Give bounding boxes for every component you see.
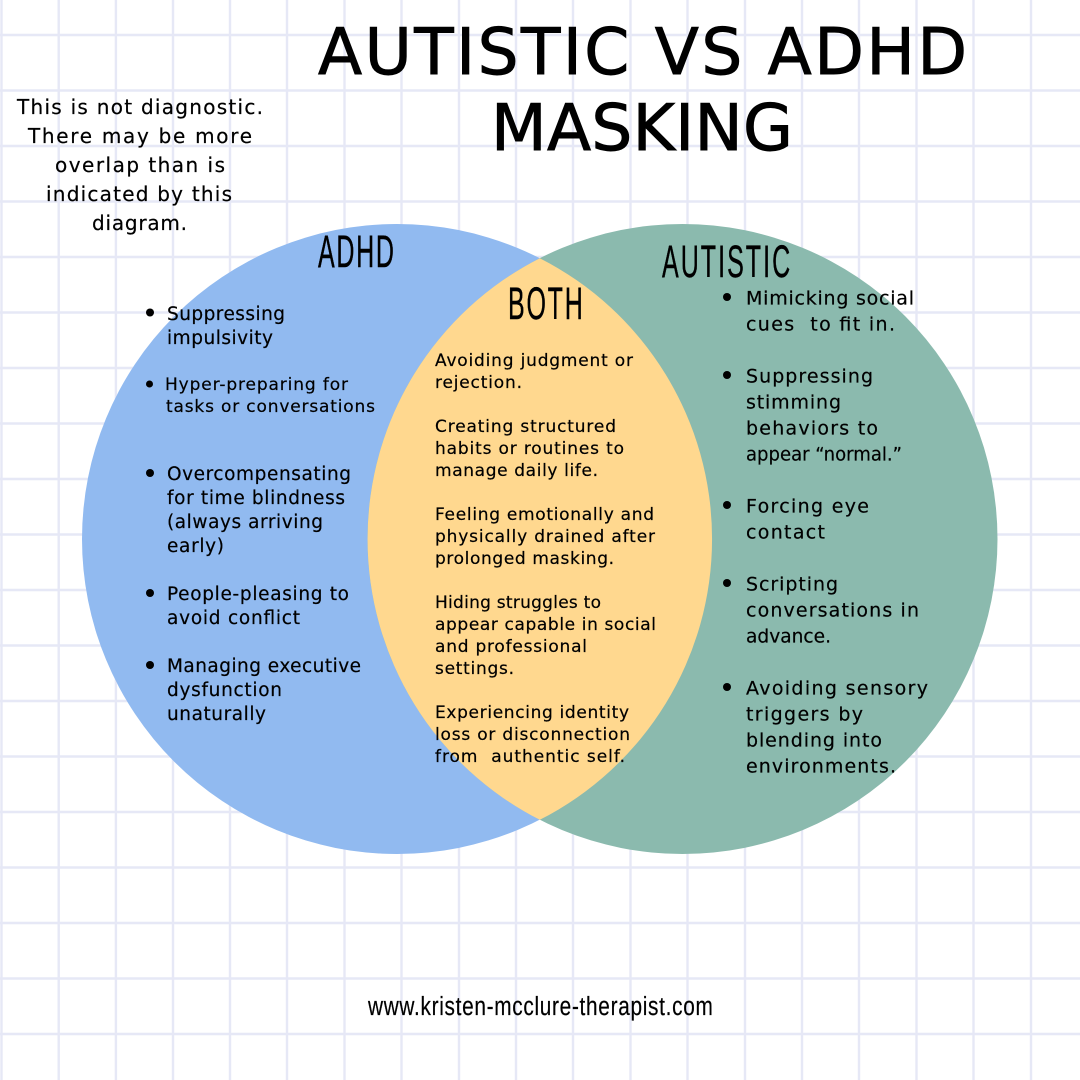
overlap: both — [368, 258, 712, 820]
autistic list — [723, 288, 928, 778]
item: overcompensating: for time blindness — [167, 488, 345, 509]
item: executive dysfunction — [146, 656, 361, 725]
item: sensory triggers: Avoiding sensory — [746, 678, 928, 700]
item: overcompensating: Overcompensating — [167, 464, 351, 485]
item: structured habits: manage daily life. — [435, 461, 598, 481]
footer website: www.kristen-mcclure-therapist.com — [367, 992, 713, 1021]
item: hiding struggles: Hiding struggles to — [435, 593, 601, 613]
disclaimer note: diagram. — [92, 211, 187, 235]
item: eye contact — [723, 496, 869, 544]
item: scripting: Scripting — [746, 574, 838, 596]
item: sensory triggers: triggers by — [746, 704, 863, 726]
item: identity loss: loss or disconnection — [435, 725, 630, 745]
item: suppressing impulsivity: impulsivity — [167, 328, 273, 349]
disclaimer note: overlap than is — [55, 153, 225, 177]
disclaimer note — [16, 95, 263, 235]
item: overcompensating: early) — [167, 536, 224, 557]
item: stimming: appear “normal.” — [746, 444, 902, 466]
item: suppressing impulsivity: Suppressing — [167, 304, 285, 325]
item: eye contact: contact — [746, 522, 825, 544]
circle: autistic — [368, 224, 998, 854]
heading: both: BOTH — [508, 278, 583, 329]
venn diagram — [82, 224, 998, 854]
item: identity loss: from authentic self. — [435, 747, 625, 767]
item: hiding struggles: settings. — [435, 659, 514, 679]
item: drained: Feeling emotionally and — [435, 505, 654, 525]
item: hiding struggles: appear capable in social — [435, 615, 656, 635]
circle: ADHD — [82, 224, 712, 854]
item: hyper-preparing — [146, 375, 375, 417]
title: MASKING — [491, 91, 793, 166]
item: mimicking: cues to fit in. — [746, 314, 895, 336]
item: people-pleasing: avoid conflict — [167, 608, 300, 629]
disclaimer note: There may be more — [27, 124, 252, 148]
item: identity loss: Experiencing identity — [435, 703, 629, 723]
title — [318, 15, 967, 166]
item: scripting: advance. — [746, 626, 831, 648]
item: hiding struggles — [435, 593, 656, 679]
item: structured habits: habits or routines to — [435, 439, 624, 459]
item: stimming: stimming — [746, 392, 841, 414]
item: avoiding judgment: rejection. — [435, 373, 522, 393]
both list — [435, 351, 656, 767]
item: identity loss — [435, 703, 630, 767]
item: mimicking: Mimicking social — [746, 288, 914, 310]
item: overcompensating: (always arriving — [167, 512, 323, 533]
item: structured habits — [435, 417, 624, 481]
item: people-pleasing: People-pleasing to — [167, 584, 349, 605]
item: stimming: Suppressing — [746, 366, 873, 388]
item: people-pleasing — [146, 584, 349, 629]
heading: autistic: AUTISTIC — [662, 236, 790, 287]
item: drained: prolonged masking. — [435, 549, 614, 569]
heading: ADHD: ADHD — [318, 226, 394, 277]
item: executive dysfunction: dysfunction — [167, 680, 282, 701]
item: stimming: behaviors to — [746, 418, 878, 440]
item: executive dysfunction: unaturally — [167, 704, 266, 725]
item: drained: physically drained after — [435, 527, 655, 547]
item: hyper-preparing: Hyper-preparing for — [165, 375, 348, 395]
item: executive dysfunction: Managing executive — [167, 656, 361, 677]
item: hiding struggles: and professional — [435, 637, 587, 657]
item: scripting: conversations in — [746, 600, 919, 622]
item: sensory triggers: environments. — [746, 756, 896, 778]
title: AUTISTIC VS ADHD — [318, 15, 967, 90]
item: overcompensating — [146, 464, 351, 557]
item: hyper-preparing: tasks or conversations — [166, 397, 375, 417]
item: stimming — [723, 366, 902, 466]
item: suppressing impulsivity — [146, 304, 285, 349]
item: avoiding judgment — [435, 351, 633, 393]
item: structured habits: Creating structured — [435, 417, 616, 437]
item: drained — [435, 505, 655, 569]
item: eye contact: Forcing eye — [746, 496, 869, 518]
item: scripting — [723, 574, 919, 648]
ADHD list — [146, 304, 375, 725]
item: sensory triggers — [723, 678, 928, 778]
item: sensory triggers: blending into — [746, 730, 882, 752]
disclaimer note: indicated by this — [46, 182, 232, 206]
item: avoiding judgment: Avoiding judgment or — [435, 351, 633, 371]
disclaimer note: This is not diagnostic. — [16, 95, 263, 119]
item: mimicking — [723, 288, 914, 336]
